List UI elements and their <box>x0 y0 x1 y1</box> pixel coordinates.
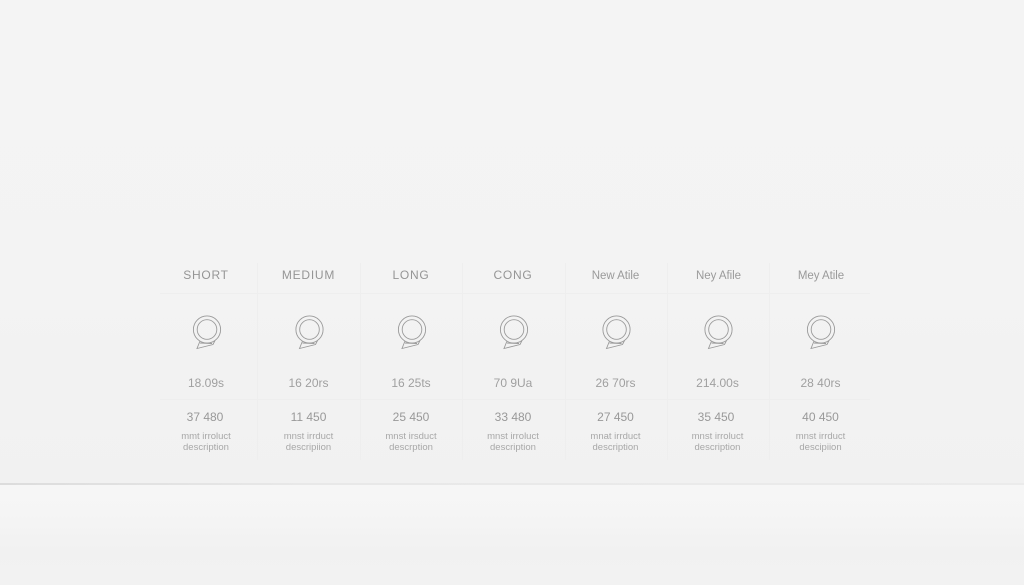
column 7: Mey Atile <box>796 270 846 453</box>
column 4: CONG: 70 9Ua <box>494 376 533 390</box>
column 7: Mey Atile: 28 40rs <box>800 376 841 390</box>
column 7: Mey Atile: mnst irrduct <box>796 431 846 442</box>
column 5: New Atile: mnat irrduct <box>590 431 641 442</box>
column 1: SHORT: description <box>183 442 229 453</box>
column 2: MEDIUM: 16 20rs <box>288 376 329 390</box>
column 7: Mey Atile: Mey Atile <box>798 270 844 282</box>
column 1: SHORT: 37 480 <box>187 410 224 424</box>
column 6: Ney Afile: description <box>695 442 740 453</box>
column 5: New Atile <box>590 270 641 453</box>
column 6: Ney Afile: Ney Afile <box>696 270 741 282</box>
column 1: SHORT: 18.09s <box>188 376 224 390</box>
column 3: LONG: mnst irsduct <box>385 431 437 442</box>
column 3: LONG: LONG <box>392 268 430 282</box>
column 6: Ney Afile: 214.00s <box>696 376 739 390</box>
column 3: LONG <box>385 268 437 453</box>
column 4: CONG: description <box>490 442 536 453</box>
column 2: MEDIUM: mnst irrduct <box>284 431 334 442</box>
column 5: New Atile: 26 70rs <box>595 376 636 390</box>
column 1: SHORT: SHORT <box>183 268 229 282</box>
column 2: MEDIUM: 11 450 <box>291 410 327 424</box>
column 5: New Atile: 27 450 <box>597 410 634 424</box>
column 1: SHORT: mmt irroluct <box>181 431 231 442</box>
column 4: CONG <box>487 268 539 453</box>
background: floor <box>0 484 1024 585</box>
column 7: Mey Atile: descipiion <box>799 442 842 453</box>
column 4: CONG: CONG <box>494 268 532 282</box>
column 3: LONG: 16 25ts <box>391 376 431 390</box>
column 3: LONG: descrption <box>389 442 433 453</box>
column 3: LONG: 25 450 <box>393 410 430 424</box>
column 5: New Atile: New Atile <box>592 270 639 282</box>
comparison table <box>160 263 870 460</box>
column 6: Ney Afile: 35 450 <box>698 410 735 424</box>
column 5: New Atile: description <box>593 442 638 453</box>
column 1: SHORT <box>181 268 231 453</box>
column 4: CONG: mnst irroluct <box>487 431 539 442</box>
column 7: Mey Atile: 40 450 <box>802 410 839 424</box>
column 2: MEDIUM: MEDIUM <box>282 268 335 282</box>
column 2: MEDIUM <box>282 268 335 453</box>
column 6: Ney Afile <box>692 270 744 453</box>
column 4: CONG: 33 480 <box>495 410 532 424</box>
column 6: Ney Afile: mnst irroluct <box>692 431 744 442</box>
column 2: MEDIUM: descripiion <box>286 442 331 453</box>
